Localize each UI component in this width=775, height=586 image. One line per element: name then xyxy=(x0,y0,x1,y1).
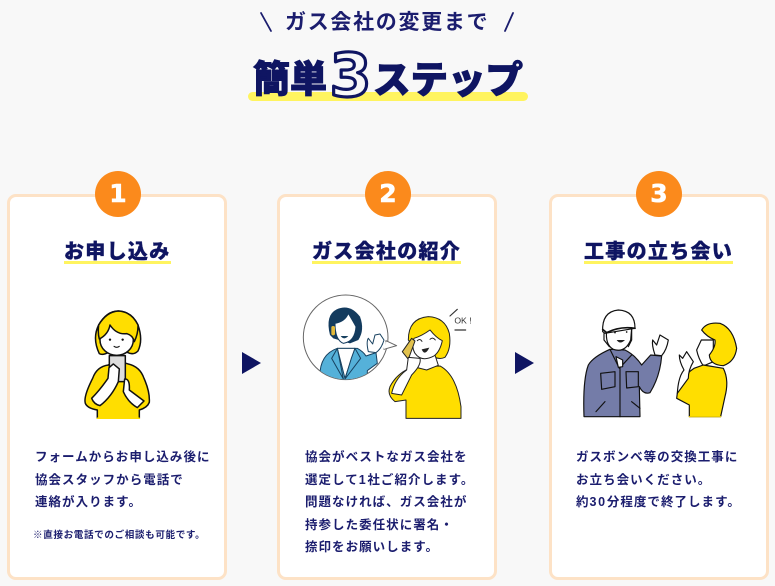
step 2 description: 選定して1社ご紹介します。 xyxy=(305,473,474,487)
step 1 badge xyxy=(95,171,141,217)
illustration: phone call with agent xyxy=(302,294,471,419)
title: ステップ xyxy=(373,59,523,101)
step 2 description xyxy=(305,450,474,554)
step 3 description xyxy=(576,450,741,509)
step 2 description: 協会がベストなガス会社を xyxy=(305,450,468,464)
panel: step 1 card xyxy=(7,194,227,580)
step 3 description: 約30分程度で終了します。 xyxy=(576,495,741,509)
step 2 heading: ガス会社の紹介 xyxy=(312,241,461,263)
step 3 description: お立ち会いください。 xyxy=(576,473,711,487)
subtitle slashes xyxy=(260,12,514,32)
step 3 badge: 3 xyxy=(650,179,668,208)
title: 簡単 xyxy=(253,59,327,100)
subtitle: ガス会社の変更まで xyxy=(285,11,489,34)
step 1 heading: お申し込み xyxy=(64,241,170,263)
step 1 description: 連絡が入ります。 xyxy=(35,495,142,509)
step 3 heading: 工事の立ち会い xyxy=(584,241,733,263)
title highlight xyxy=(248,92,528,101)
step 2 badge: 2 xyxy=(379,179,397,208)
panel: step 3 card xyxy=(549,194,769,580)
step 3 description: ガスボンベ等の交換工事に xyxy=(576,450,738,464)
step 2 badge xyxy=(365,171,411,217)
step 1 badge: 1 xyxy=(109,179,127,208)
panel: step 2 card xyxy=(277,194,497,580)
step 3 badge xyxy=(636,171,682,217)
step 1 description: 協会スタッフから電話で xyxy=(35,473,184,487)
title numeral 3: 3 xyxy=(330,41,371,111)
step 2 description: 持参した委任状に署名・ xyxy=(305,518,454,532)
step 1 description: フォームからお申し込み後に xyxy=(35,450,211,464)
title xyxy=(252,59,523,101)
step 1 description xyxy=(35,450,211,509)
illustration: phone call with agent: OK ! xyxy=(454,315,472,325)
step 2 description: 問題なければ、ガス会社が xyxy=(305,495,467,509)
step 2 description: 捺印をお願いします。 xyxy=(305,540,439,554)
step 1 note: ※直接お電話でのご相談も可能です。 xyxy=(33,530,205,541)
